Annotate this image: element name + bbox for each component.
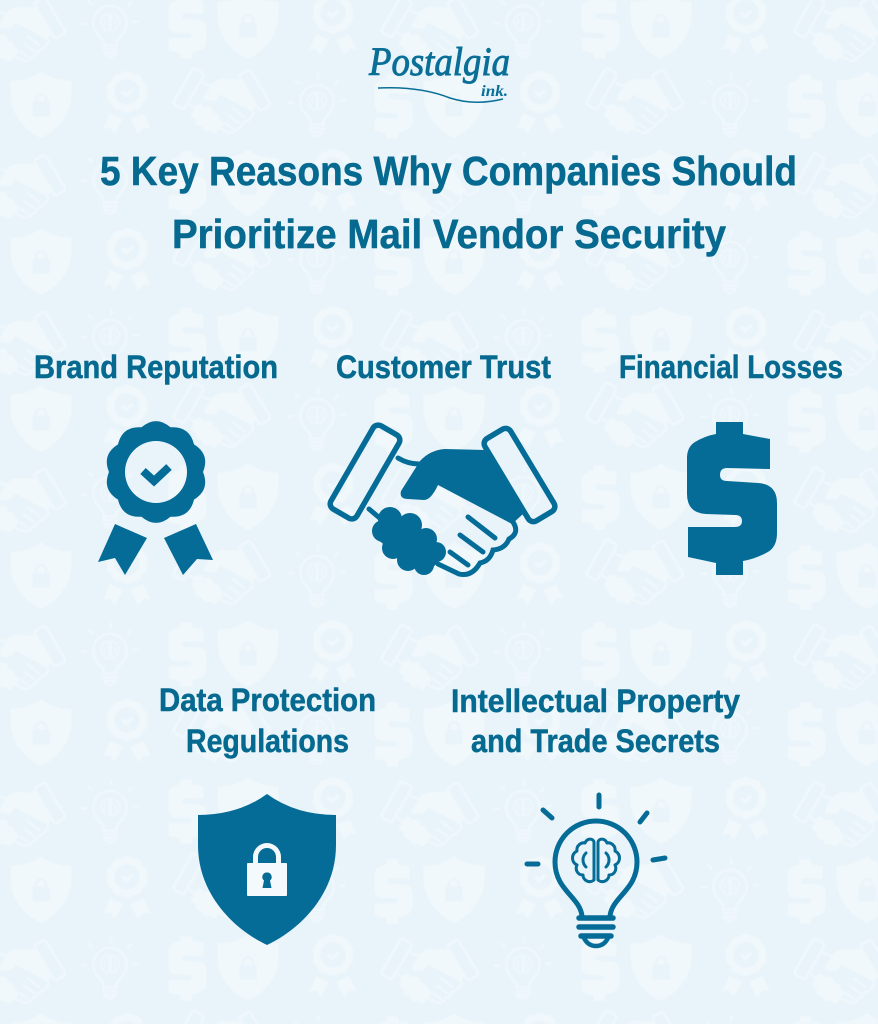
panel: customer trust <box>328 349 557 575</box>
heading: intellectual property and trade secrets: Intellectual Property <box>451 683 740 719</box>
icon: handshake <box>328 423 557 575</box>
icon: medal with check <box>98 421 213 575</box>
panel: financial losses <box>619 349 843 575</box>
panel: brand reputation <box>34 349 278 575</box>
panel: intellectual property and trade secrets <box>451 683 740 946</box>
heading: data protection regulations: Data Protection <box>159 682 376 718</box>
heading: brand reputation: Brand Reputation <box>34 349 278 385</box>
heading: intellectual property and trade secrets <box>451 683 740 759</box>
logo: Postalgia ink: Postalgia <box>368 39 510 84</box>
heading: customer trust: Customer Trust <box>336 349 551 385</box>
icon: shield with padlock <box>198 794 336 945</box>
logo: Postalgia ink: ink. <box>481 83 508 100</box>
heading: data protection regulations <box>159 682 376 759</box>
title: 5 Key Reasons Why Companies Should <box>100 148 797 194</box>
title: Prioritize Mail Vendor Security <box>172 211 726 257</box>
heading: financial losses: Financial Losses <box>619 349 843 385</box>
panel: data protection regulations <box>159 682 376 945</box>
logo: Postalgia ink <box>368 39 510 102</box>
icon: light bulb with brain <box>527 795 665 946</box>
heading: data protection regulations: Regulations <box>186 723 349 759</box>
title <box>100 148 797 257</box>
icon: dollar sign <box>687 422 777 575</box>
heading: intellectual property and trade secrets: and Trade Secrets <box>471 723 720 759</box>
